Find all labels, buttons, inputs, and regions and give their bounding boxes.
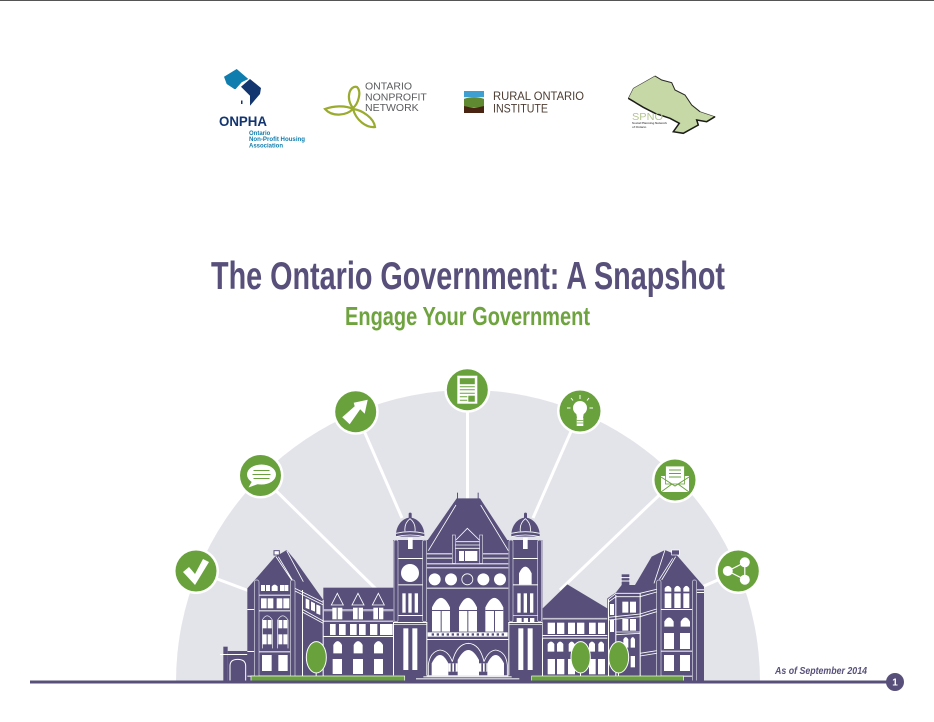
logo: ONPHA: Non-Profit Housing — [249, 137, 305, 143]
icon: arrow — [333, 389, 379, 435]
logo: ONPHA: Ontario — [249, 131, 271, 137]
icon: speech bubble — [238, 452, 284, 498]
logo: Rural Ontario Institute: INSTITUTE — [493, 104, 548, 116]
logo: Ontario Nonprofit Network — [325, 80, 427, 127]
logo: SPNO map of Ontario — [628, 76, 715, 133]
page number badge — [886, 673, 904, 691]
icon: check mark — [173, 548, 219, 594]
parliament building — [220, 493, 704, 683]
logo: SPNO map of Ontario: of Ontario — [632, 125, 646, 129]
right tower — [523, 538, 528, 549]
icon: share — [715, 548, 761, 594]
logo: ONPHA: Association — [249, 144, 283, 150]
icon: newspaper — [444, 367, 490, 413]
icon: light bulb — [557, 388, 603, 434]
logo: Ontario Nonprofit Network: NONPROFIT — [365, 91, 427, 103]
domes — [396, 518, 424, 537]
subtitle: Engage Your Government — [345, 301, 590, 331]
balustrade — [428, 632, 508, 637]
left wing — [220, 550, 394, 683]
page number badge: 1 — [892, 678, 898, 688]
gable window — [459, 551, 477, 561]
icon: envelope — [652, 457, 698, 503]
logo: Ontario Nonprofit Network: ONTARIO — [365, 80, 412, 92]
date note: As of September 2014 — [774, 665, 867, 677]
baseline rule — [30, 680, 888, 684]
background semicircle — [176, 390, 760, 682]
logo: Ontario Nonprofit Network: NETWORK — [365, 102, 419, 114]
main arched windows — [432, 598, 450, 632]
title: The Ontario Government: A Snapshot — [211, 255, 725, 298]
right wing — [532, 550, 704, 683]
lower arches — [432, 655, 448, 675]
central block — [393, 493, 543, 683]
logo: Rural Ontario Institute: RURAL ONTARIO — [493, 91, 584, 103]
left lawn — [251, 676, 405, 681]
centre bands — [427, 553, 452, 554]
logo: SPNO map of Ontario: SPNO — [632, 112, 663, 123]
logo: Rural Ontario Institute — [464, 91, 584, 116]
spokes connecting icons to the building — [196, 390, 738, 593]
logo: ONPHA: ONPHA — [219, 113, 267, 129]
logo: SPNO map of Ontario: Social Planning Network — [632, 121, 667, 125]
logo: ONPHA — [219, 69, 305, 150]
left tower — [408, 538, 413, 549]
